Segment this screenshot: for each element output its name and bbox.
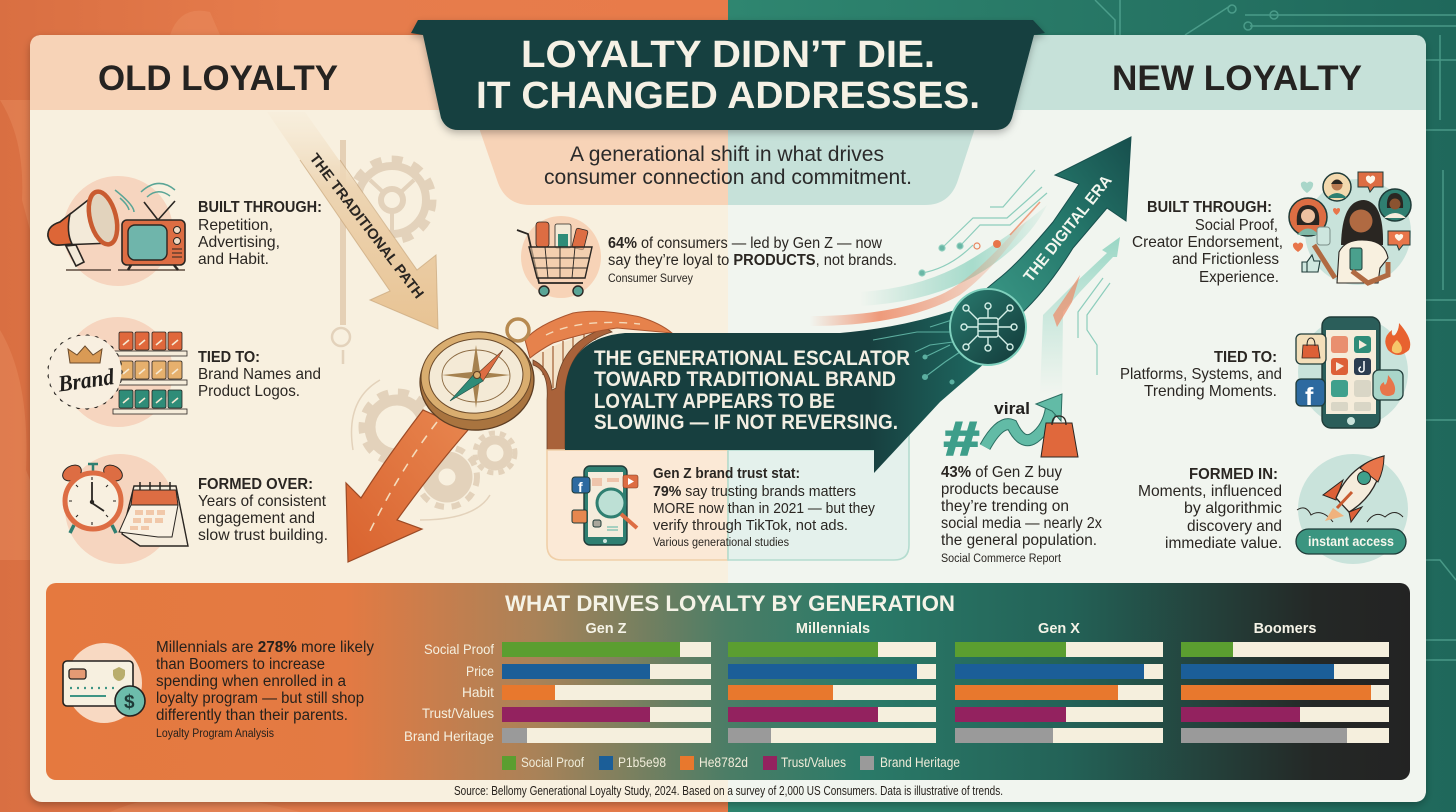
text: built through (new): Experience.	[1199, 269, 1279, 286]
text: built through (old): Advertising,	[198, 234, 280, 251]
text: gen z stat: Gen Z brand trust stat:	[653, 465, 800, 482]
heading: chart title: WHAT DRIVES LOYALTY BY GENERATION	[505, 591, 955, 616]
text: formed in (new): discovery and	[1187, 518, 1282, 535]
icon: viral trend: #	[944, 412, 979, 465]
text: tied to (new): TIED TO:	[1214, 349, 1277, 366]
callout: generational escalator: SLOWING — IF NOT REVERSING.	[594, 411, 898, 434]
text: 43% stat: the general population.	[941, 532, 1097, 549]
arrow: the digital era	[985, 137, 1131, 330]
text: 43% stat: Social Commerce Report	[941, 553, 1062, 565]
text: built through (new)	[1132, 199, 1283, 286]
callout: generational escalator: TOWARD TRADITIONAL BRAND	[594, 368, 896, 391]
chart row labels: Trust/Values	[422, 705, 494, 721]
text: gen z stat: Various generational studies	[653, 537, 789, 549]
heading: new loyalty: NEW LOYALTY	[1112, 59, 1362, 98]
icon: background gears	[332, 140, 515, 520]
chart legend: Brand Heritage	[880, 755, 960, 770]
icon: alarm clock and calendar	[60, 454, 188, 564]
icon: rocket with instant access pill	[1296, 454, 1408, 564]
text: formed over (old): engagement and	[198, 510, 315, 527]
chart legend: He8782d	[699, 755, 748, 770]
text: formed in (new): by algorithmic	[1184, 500, 1282, 517]
text: gen z stat: MORE now than in 2021 — but they	[653, 500, 875, 517]
icon: viral trend	[944, 394, 1078, 465]
text: tied to (new): Platforms, Systems, and	[1120, 366, 1282, 383]
panel: what drives loyalty by generation	[46, 583, 1410, 780]
title banner	[411, 20, 1045, 130]
icon: brand badge and shelves: Brand	[56, 364, 116, 397]
icon: social proof people	[1289, 172, 1411, 285]
text: formed in (new): immediate value.	[1165, 535, 1282, 552]
text: 64% stat: Consumer Survey	[608, 273, 693, 285]
bar chart: boomers	[1181, 621, 1389, 743]
icon: phone with magnifier	[572, 466, 638, 545]
arrow: the digital era: THE DIGITAL ERA	[1021, 172, 1116, 285]
text: millennials stat: spending when enrolled in a	[156, 673, 346, 690]
chart row labels: Brand Heritage	[404, 728, 494, 744]
text: tied to (old): TIED TO:	[198, 349, 260, 366]
bar chart: gen x	[955, 621, 1163, 743]
bar chart: gen z	[502, 621, 711, 743]
subtitle panel	[478, 125, 976, 205]
text: 43% stat	[941, 464, 1102, 565]
text: millennials stat: Loyalty Program Analysis	[156, 728, 274, 740]
text: built through (new): Creator Endorsement,	[1132, 234, 1283, 251]
text: formed in (new): Moments, influenced	[1138, 483, 1282, 500]
text: tied to (new)	[1120, 349, 1282, 400]
icon: network hub	[950, 289, 1026, 365]
text: formed in (new)	[1138, 466, 1282, 552]
chart row labels: Price	[466, 663, 494, 679]
arrow: the traditional path	[267, 112, 438, 329]
text: millennials stat: loyalty program — but still shop	[156, 690, 364, 707]
icon: phone with magnifier: f	[578, 479, 583, 495]
text: 64% stat: 64% of consumers — led by Gen Z — now	[608, 235, 883, 252]
text: formed over (old): FORMED OVER:	[198, 476, 313, 493]
icon: viral trend: viral	[994, 399, 1030, 418]
icon: phone with apps	[1296, 317, 1410, 428]
text: millennials stat: differently than their parents.	[156, 707, 348, 724]
icon: credit card: $	[124, 692, 135, 713]
bar chart: millennials	[728, 621, 936, 743]
text: formed over (old): slow trust building.	[198, 527, 328, 544]
text: 64% stat	[608, 235, 897, 285]
text: 64% stat: say they’re loyal to PRODUCTS, not brands.	[608, 252, 897, 269]
icon: phone with apps: f	[1305, 383, 1314, 411]
chart legend: P1b5e98	[618, 755, 666, 770]
panel: gen z brand trust stat	[547, 430, 909, 560]
illustration: digital streaks and secondary arrow	[810, 170, 1120, 395]
text: tied to (old): Brand Names and	[198, 366, 321, 383]
text: gen z stat: verify through TikTok, not ads.	[653, 517, 848, 534]
bar chart: millennials: Millennials	[796, 621, 870, 637]
text: millennials stat: than Boomers to increase	[156, 656, 325, 673]
text: tied to (old)	[198, 349, 321, 400]
icon: brand badge and shelves	[50, 317, 187, 427]
bar chart: boomers: Boomers	[1254, 621, 1316, 637]
title banner: LOYALTY DIDN’T DIE.	[521, 34, 935, 76]
text: 43% stat: social media — nearly 2x	[941, 515, 1102, 532]
text: millennials stat	[156, 639, 374, 740]
text: built through (old): BUILT THROUGH:	[198, 199, 322, 216]
text: gen z stat	[653, 465, 875, 549]
subtitle panel: consumer connection and commitment.	[544, 166, 912, 189]
chart row labels: Social Proof	[424, 641, 494, 657]
heading: old loyalty: OLD LOYALTY	[98, 59, 338, 98]
icon: credit card	[63, 643, 145, 723]
text: tied to (old): Product Logos.	[198, 383, 300, 400]
text: 43% stat: they’re trending on	[941, 498, 1069, 515]
chart row labels: Habit	[462, 684, 494, 700]
text: built through (new): Social Proof,	[1195, 217, 1278, 234]
callout: generational escalator	[565, 310, 1000, 473]
bar chart: gen x: Gen X	[1038, 621, 1080, 637]
text: built through (new): and Frictionless	[1172, 251, 1279, 268]
text: tied to (new): Trending Moments.	[1144, 383, 1277, 400]
text: formed in (new): FORMED IN:	[1189, 466, 1278, 483]
icon: rocket with instant access pill: instant access	[1308, 534, 1394, 549]
text: 43% stat: 43% of Gen Z buy	[941, 464, 1062, 481]
chart legend: Trust/Values	[781, 755, 846, 770]
title banner: IT CHANGED ADDRESSES.	[476, 75, 980, 117]
chart legend: Social Proof	[521, 755, 584, 770]
chart legend	[502, 755, 960, 770]
icon: compass	[416, 319, 538, 435]
text: 43% stat: products because	[941, 481, 1059, 498]
text: built through (old): and Habit.	[198, 251, 269, 268]
arrow: the traditional path: THE TRADITIONAL PATH	[306, 151, 426, 302]
text: formed over (old)	[198, 476, 328, 544]
callout: generational escalator: LOYALTY APPEARS TO BE	[594, 390, 835, 413]
text: millennials stat: Millennials are 278% more likely	[156, 639, 374, 656]
callout: generational escalator: THE GENERATIONAL ESCALATOR	[594, 347, 910, 370]
icon: shopping cart	[517, 216, 601, 298]
text: formed over (old): Years of consistent	[198, 493, 327, 510]
text: built through (old): Repetition,	[198, 217, 273, 234]
text: built through (new): BUILT THROUGH:	[1147, 199, 1272, 216]
text: built through (old)	[198, 199, 322, 268]
icon: megaphone and tv	[48, 176, 185, 286]
arrow: orange road from compass	[346, 311, 672, 562]
subtitle panel: A generational shift in what drives	[570, 143, 884, 166]
text: gen z stat: 79% say trusting brands matters	[653, 483, 856, 500]
bar chart: gen z: Gen Z	[585, 621, 627, 637]
source note: Source: Bellomy Generational Loyalty Study, 2024. Based on a survey of 2,000 US Consumers. Data is illustrative of trends.	[454, 784, 1003, 798]
chart row labels	[404, 641, 494, 744]
